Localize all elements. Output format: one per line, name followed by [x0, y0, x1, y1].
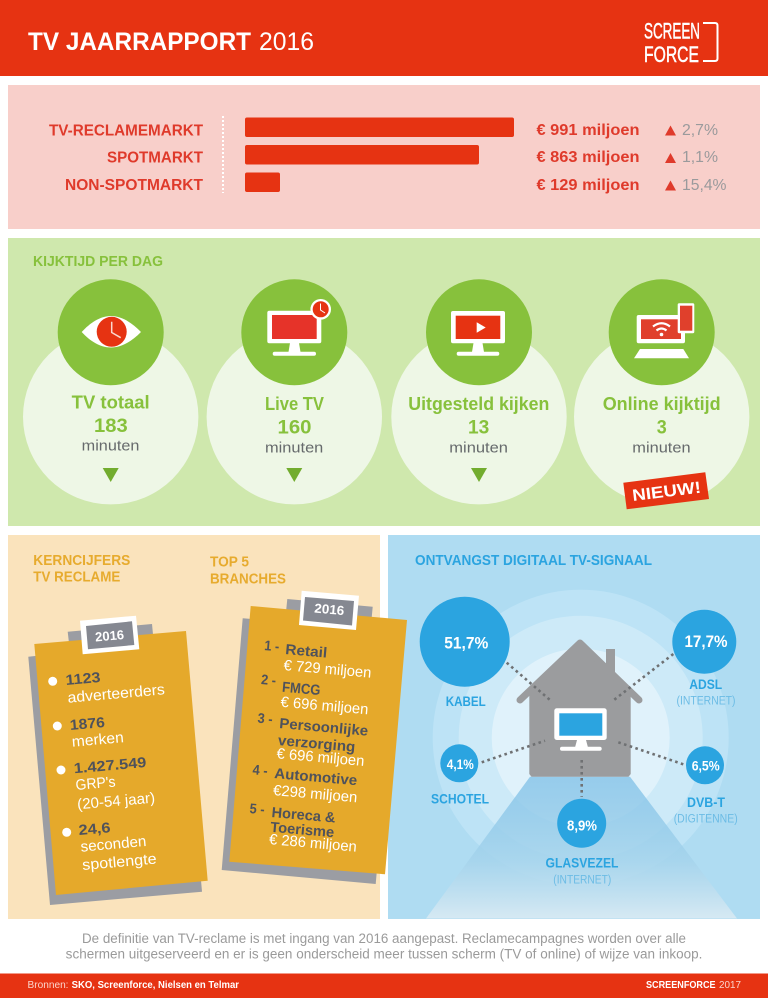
stat: TV totaal: 183: [94, 416, 128, 437]
heading: top 5 branches: [210, 555, 286, 587]
item: Retail: Retail: [285, 642, 328, 662]
stat: Online kijktijd: minuten: [632, 439, 691, 456]
item: spotlengte: seconden: [80, 833, 147, 856]
heading: reception: ONTVANGST DIGITAAL TV-SIGNAAL: [415, 553, 652, 569]
item: Automotive: Automotive: [274, 766, 358, 789]
stat: Uitgesteld kijken: [391, 279, 567, 504]
stat: Live TV: 160: [278, 417, 312, 438]
stat: Online kijktijd: Online kijktijd: [603, 394, 721, 414]
panel: digital TV reception: [388, 535, 760, 919]
item: GRP's: [56, 755, 156, 813]
item: Horeca en Toerisme: € 286 miljoen: [268, 831, 357, 856]
row: TV-reclamemarkt: 2,7%: [682, 122, 718, 139]
row: Spotmarkt: SPOTMARKT: [107, 150, 203, 166]
heading: kerncijfers: TV RECLAME: [33, 570, 121, 586]
item: FMCG: € 696 miljoen: [280, 694, 369, 718]
row: Non-spotmarkt: 15,4%: [682, 177, 726, 194]
stat: TV totaal: [23, 279, 198, 504]
row: Spotmarkt: [107, 145, 718, 166]
stat: Uitgesteld kijken: Uitgesteld kijken: [408, 394, 549, 414]
item: Persoonlijke verzorging: [257, 710, 369, 770]
item: FMCG: 2 -: [260, 671, 277, 688]
title: 2016: [259, 28, 314, 56]
footer band: [0, 974, 768, 998]
badge: Nieuw: [623, 472, 709, 509]
item: merken: 1876: [69, 715, 106, 734]
sources: SKO, Screenforce, Nielsen en Telmar: [72, 980, 239, 991]
item: Persoonlijke verzorging: verzorging: [277, 733, 356, 756]
item: Automotive: [252, 761, 358, 806]
item: merken: [53, 715, 124, 751]
card: top 5 branches: 2016: [314, 601, 345, 618]
stat: Live TV: minuten: [265, 439, 323, 456]
item: Retail: [264, 637, 372, 682]
credit: SCREENFORCE: [646, 980, 716, 991]
footnote: schermen uitgeserveerd en er is geen onderscheid meer tussen scherm (TV of online) of wijze van inkoop.: [66, 946, 702, 961]
row: TV-reclamemarkt: [49, 118, 718, 140]
stat: Kabel: 51,7%: [444, 633, 488, 652]
sources: Bronnen:: [28, 980, 68, 991]
panel: key figures and top branches: [8, 535, 407, 919]
item: spotlengte: spotlengte: [82, 851, 157, 874]
stat: ADSL: ADSL: [689, 676, 723, 692]
logo: Screenforce: FORCE: [644, 42, 699, 67]
stat: Schotel: 4,1%: [447, 757, 474, 772]
item: GRP's: (20-54 jaar): [77, 790, 156, 813]
stat: Online kijktijd: 3: [657, 417, 667, 438]
stat: Glasvezel: GLASVEZEL: [546, 854, 619, 870]
item: spotlengte: [62, 820, 157, 874]
card: top 5 branches: [222, 591, 407, 884]
stat: Schotel: [431, 744, 489, 806]
heading: top 5 branches: TOP 5: [210, 555, 249, 571]
stat: Uitgesteld kijken: 13: [468, 417, 489, 438]
stat: Kabel: KABEL: [446, 693, 486, 709]
row: Non-spotmarkt: [65, 172, 726, 194]
stat: DVB-T: [674, 746, 738, 825]
stat: Kabel: [420, 597, 510, 709]
title: TV JAARRAPPORT: [28, 28, 251, 56]
item: adverteerders: adverteerders: [67, 681, 165, 707]
heading: kerncijfers: KERNCIJFERS: [33, 553, 131, 569]
panel: viewing time per day: [8, 238, 760, 526]
card: kerncijfers: 2016: [94, 627, 125, 644]
row: TV-reclamemarkt: TV-RECLAMEMARKT: [49, 122, 203, 140]
item: Horeca en Toerisme: Horeca &: [271, 805, 337, 827]
item: merken: merken: [71, 729, 124, 751]
stat: Schotel: SCHOTEL: [431, 790, 489, 806]
stat: DVB-T: 6,5%: [692, 758, 720, 773]
item: Horeca en Toerisme: [249, 800, 357, 856]
icon: house with TV: [520, 643, 639, 777]
item: Horeca en Toerisme: 5 -: [249, 800, 266, 817]
card: kerncijfers: [28, 616, 208, 905]
item: Automotive: 4 -: [252, 761, 269, 779]
stat: Online kijktijd: [574, 279, 749, 509]
stat: Glasvezel: (INTERNET): [553, 874, 611, 886]
stat: Live TV: Live TV: [265, 394, 324, 414]
item: Persoonlijke verzorging: Persoonlijke: [279, 716, 369, 740]
item: spotlengte: 24,6: [78, 820, 111, 839]
row: Spotmarkt: € 863 miljoen: [536, 149, 640, 166]
stat: Glasvezel: 8,9%: [567, 819, 597, 835]
row: TV-reclamemarkt: € 991 miljoen: [536, 122, 640, 139]
header band: [0, 0, 768, 76]
row: Non-spotmarkt: € 129 miljoen: [536, 177, 640, 194]
item: FMCG: FMCG: [281, 680, 321, 699]
item: Horeca en Toerisme: Toerisme: [270, 820, 335, 841]
logo: Screenforce: [644, 18, 718, 67]
stat: ADSL: [672, 610, 736, 708]
item: Automotive: €298 miljoen: [272, 782, 358, 806]
heading: kerncijfers: [33, 553, 131, 586]
stat: DVB-T: DVB-T: [687, 794, 725, 810]
stat: TV totaal: minuten: [82, 438, 139, 455]
stat: ADSL: (INTERNET): [676, 696, 736, 708]
heading: viewing time: KIJKTIJD PER DAG: [33, 254, 163, 270]
stat: Uitgesteld kijken: minuten: [449, 439, 508, 456]
badge: Nieuw: NIEUW!: [631, 479, 702, 505]
item: GRP's: 1.427.549: [73, 755, 147, 777]
item: adverteerders: 1123: [65, 670, 101, 689]
row: Spotmarkt: 1,1%: [682, 149, 718, 166]
logo: Screenforce: SCREEN: [644, 18, 700, 44]
item: Persoonlijke verzorging: € 696 miljoen: [276, 745, 365, 770]
item: Retail: € 729 miljoen: [283, 657, 372, 682]
credit: 2017: [719, 980, 741, 991]
connectors: [482, 654, 683, 797]
stat: Live TV: [207, 279, 382, 504]
item: adverteerders: [48, 670, 165, 707]
item: Persoonlijke verzorging: 3 -: [257, 710, 274, 727]
item: Retail: 1 -: [264, 637, 280, 654]
stat: Glasvezel: [546, 799, 619, 886]
stat: TV totaal: TV totaal: [72, 392, 150, 412]
stat: ADSL: 17,7%: [684, 632, 728, 651]
footnote: [66, 931, 702, 961]
heading: top 5 branches: BRANCHES: [210, 571, 286, 587]
item: FMCG: [260, 671, 369, 718]
panel: TV advertising market: [8, 85, 760, 229]
stat: DVB-T: (DIGITENNE): [674, 813, 738, 825]
item: GRP's: GRP's: [75, 774, 116, 794]
footnote: De definitie van TV-reclame is met ingang van 2016 aangepast. Reclamecampagnes worden over alle: [82, 931, 686, 946]
row: Non-spotmarkt: NON-SPOTMARKT: [65, 177, 203, 194]
